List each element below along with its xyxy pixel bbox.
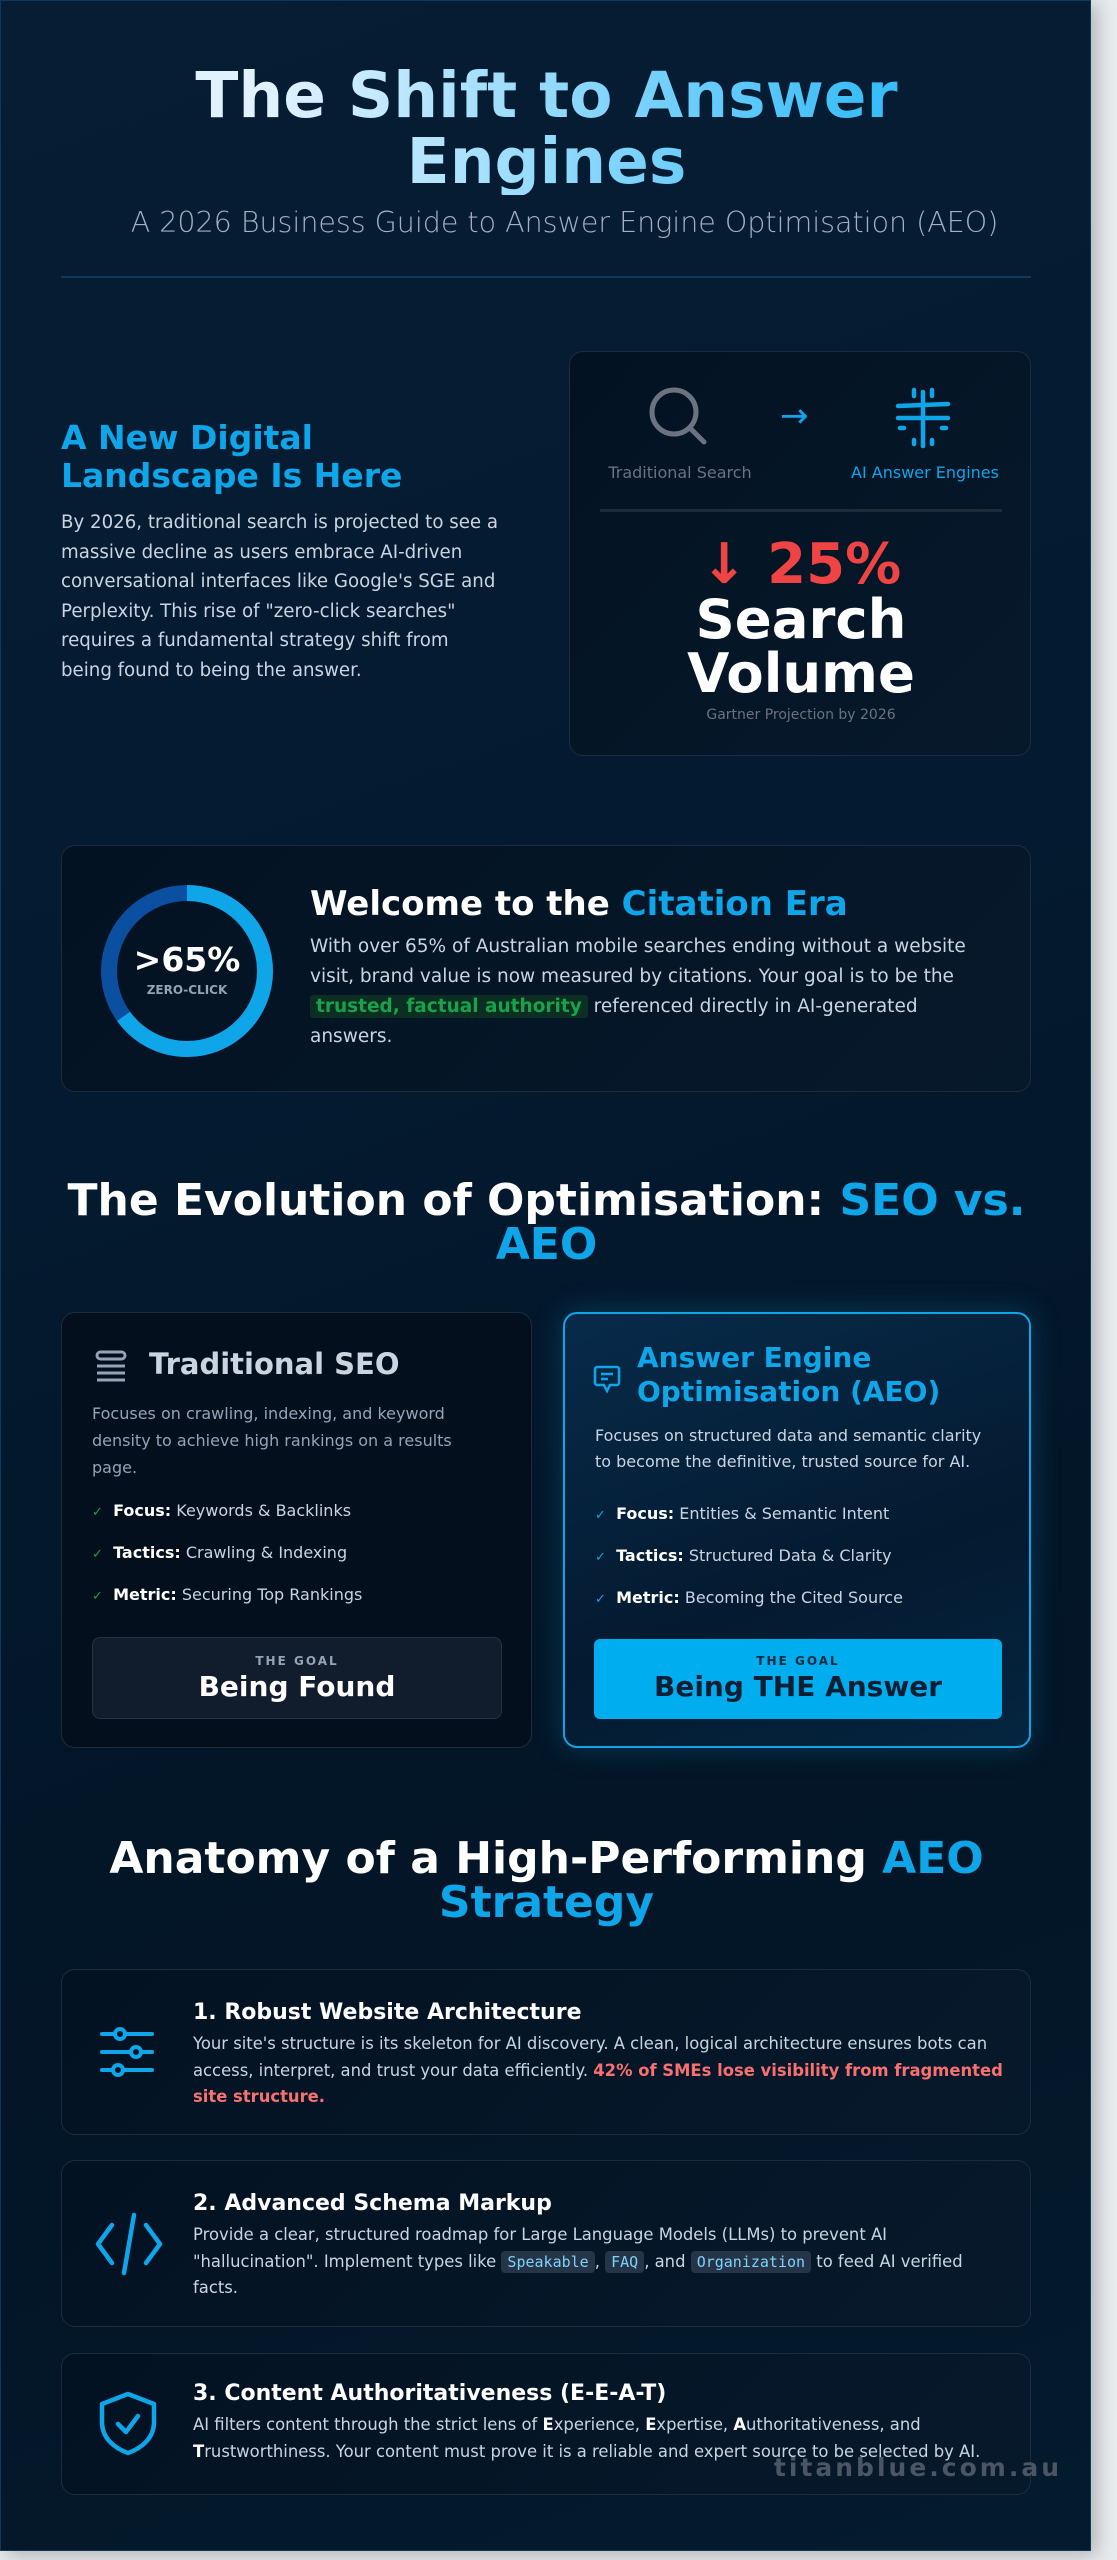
label: AI answer engines: AI Answer Engines — [851, 463, 999, 482]
item title: 3. Content Authoritativeness (E-E-A-T) — [193, 2381, 666, 2406]
list: AEO bullets: ✓ Metric: Becoming the Cited Source — [595, 1588, 903, 1607]
icon: code brackets — [96, 2212, 162, 2276]
panel: search volume stat — [569, 351, 1031, 756]
heading: AEO — [637, 1341, 940, 1408]
item text: Provide a clear, structured roadmap for Large Language Models (LLMs) to prevent AI "hallucination". Implement types like Speakable , FAQ , and Organization to feed AI verified facts. — [193, 2225, 963, 2297]
title: Engines — [407, 125, 686, 198]
source note: Gartner Projection by 2026 — [706, 707, 896, 723]
heading: anatomy of AEO strategy — [109, 1833, 984, 1928]
text: AEO description: Focuses on structured data and semantic clarity to become the definitive, trusted source for AI. — [595, 1426, 981, 1471]
heading: AEO: Answer Engine — [637, 1341, 871, 1374]
heading: evolution SEO vs AEO: AEO — [496, 1219, 597, 1270]
text: citation paragraph: With over 65% of Australian mobile searches ending without a website visit, brand value is now measured by citations. Your goal is to be the trusted, factual authority referenced directly in AI-generated answers. — [310, 936, 966, 1047]
footer: brand url: titanblue.com.au — [774, 2453, 1062, 2482]
icon: sliders — [100, 2027, 154, 2077]
subtitle: A 2026 Business Guide to Answer Engine Optimisation (AEO) — [131, 206, 998, 239]
list: SEO bullets — [92, 1501, 362, 1604]
panel: citation era — [61, 845, 1031, 1092]
label: traditional search: Traditional Search — [608, 463, 752, 482]
title: The Shift to Answer — [195, 59, 898, 132]
title — [1, 63, 1092, 195]
goal box: being found: Being Found — [199, 1670, 395, 1703]
panel: item 2 schema — [61, 2160, 1031, 2327]
icon: chat bubble — [594, 1366, 620, 1394]
icon: AI engine — [896, 388, 950, 448]
heading: anatomy of AEO strategy: Strategy — [439, 1877, 654, 1928]
list: SEO bullets: ✓ Tactics: Crawling & Indexing — [92, 1543, 347, 1562]
list: AEO bullets — [595, 1504, 903, 1607]
panel: item 3 EEAT — [61, 2353, 1031, 2495]
icon: database — [96, 1350, 126, 1382]
list: AEO bullets: ✓ Tactics: Structured Data & Clarity — [595, 1546, 892, 1565]
heading: new digital landscape: Landscape Is Here — [61, 456, 402, 495]
goal box: being the answer — [594, 1639, 1002, 1719]
panel: item 1 architecture — [61, 1969, 1031, 2135]
text: landscape paragraph: By 2026, traditional search is projected to see a massive decline as users embrace AI-driven conversational interfaces like Google's SGE and Perplexity. This rise of "zero-click searches" requires a fundamental strategy shift from being found to being the answer. — [61, 512, 498, 680]
item title: 2. Advanced Schema Markup — [193, 2191, 552, 2216]
goal box: being the answer: Being THE Answer — [654, 1670, 942, 1703]
icon: shield check — [100, 2392, 156, 2456]
item text: Your site's structure is its skeleton for AI discovery. A clean, logical architecture ensures bots can access, interpret, and trust your data efficiently. 42% of SMEs lose visibility from fragmented site structure. — [193, 2034, 1003, 2106]
heading: citation era: Welcome to the Citation Era — [310, 884, 848, 924]
heading: evolution SEO vs AEO: The Evolution of Optimisation: SEO vs. — [67, 1175, 1026, 1226]
icon: magnifier — [650, 388, 706, 444]
panel: AEO — [563, 1312, 1031, 1748]
goal box: being the answer: THE GOAL — [756, 1654, 840, 1668]
heading: new digital landscape — [61, 418, 402, 495]
arrow: → — [780, 396, 808, 436]
stat label: search volume: Search — [696, 587, 906, 651]
item text: AI filters content through the strict lens of Experience, Expertise, Authoritativeness, and Trustworthiness. Your content must prove it is a reliable and expert source to be selected by AI. — [193, 2415, 980, 2460]
chart: donut 65%: ZERO-CLICK — [147, 983, 227, 997]
heading: new digital landscape: A New Digital — [61, 418, 313, 457]
chart: donut 65%: >65% — [134, 940, 240, 979]
item title: 1. Robust Website Architecture — [193, 2000, 582, 2025]
panel: traditional SEO — [61, 1312, 532, 1748]
stat label: search volume: Volume — [687, 641, 915, 705]
heading: evolution SEO vs AEO — [67, 1175, 1026, 1270]
heading: AEO: Optimisation (AEO) — [637, 1375, 940, 1408]
list: SEO bullets: ✓ Focus: Keywords & Backlinks — [92, 1501, 351, 1520]
goal box: being found — [92, 1637, 502, 1719]
heading: traditional SEO: Traditional SEO — [149, 1347, 400, 1381]
stat label: search volume — [687, 587, 915, 705]
list: AEO bullets: ✓ Focus: Entities & Semantic Intent — [595, 1504, 889, 1523]
stat: 25% decline: ↓ 25% — [701, 532, 901, 597]
chart: donut 65% — [101, 885, 273, 1057]
text: SEO description: Focuses on crawling, indexing, and keyword density to achieve high rankings on a results page. — [92, 1404, 452, 1477]
heading: anatomy of AEO strategy: Anatomy of a High-Performing AEO — [109, 1833, 984, 1884]
goal box: being found: THE GOAL — [255, 1654, 339, 1668]
list: SEO bullets: ✓ Metric: Securing Top Rankings — [92, 1585, 362, 1604]
